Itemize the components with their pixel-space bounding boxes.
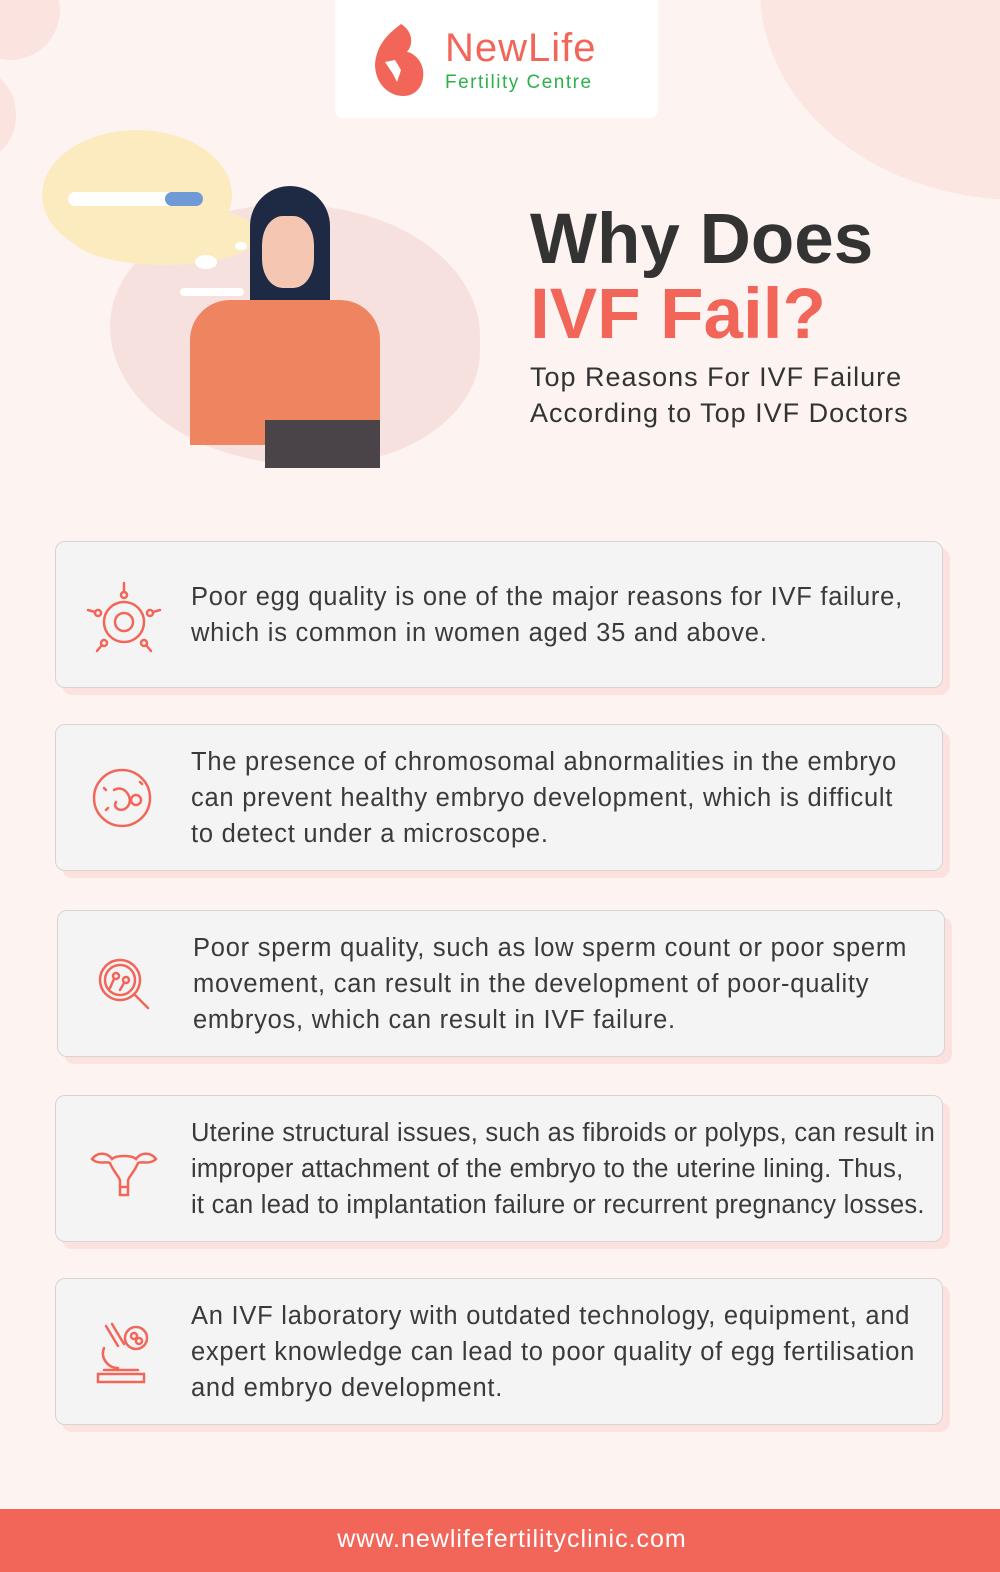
subtitle	[530, 362, 909, 428]
card 3: sperm quality: Poor sperm quality, such as low sperm count or poor sperm	[193, 934, 907, 962]
decorative background circles	[0, 0, 60, 60]
card 2: chromosomal: to detect under a microscope.	[191, 820, 549, 848]
card 2: chromosomal: can prevent healthy embryo development, which is difficult	[191, 784, 893, 812]
icon: uterus	[90, 1152, 158, 1196]
icon: egg with sperm	[86, 582, 162, 652]
logo box: Fertility Centre	[445, 72, 593, 93]
card 1: egg quality: Poor egg quality is one of the major reasons for IVF failure,	[191, 582, 903, 610]
card 5: lab	[55, 1278, 943, 1425]
card 4: uterine: improper attachment of the embryo to the uterine lining. Thus,	[191, 1154, 903, 1182]
title	[530, 200, 873, 354]
logo box	[335, 0, 658, 118]
icon: embryo	[92, 768, 152, 828]
title: Why Does	[530, 200, 873, 279]
card 4: uterine: it can lead to implantation failure or recurrent pregnancy losses.	[191, 1190, 925, 1218]
thought cloud	[42, 130, 232, 260]
subtitle: According to Top IVF Doctors	[530, 398, 909, 428]
footer: www.newlifefertilityclinic.com	[337, 1525, 687, 1553]
card 3: sperm quality: embryos, which can result in IVF failure.	[193, 1006, 676, 1034]
card 1: egg quality	[55, 541, 943, 688]
card 1: egg quality: which is common in women aged 35 and above.	[191, 618, 768, 646]
card 4: uterine: Uterine structural issues, such as fibroids or polyps, can result in	[191, 1118, 935, 1146]
woman	[250, 186, 330, 396]
icon: microscope	[96, 1322, 148, 1384]
illustration	[42, 130, 480, 468]
card 5: lab: and embryo development.	[191, 1374, 503, 1402]
card 3: sperm quality: movement, can result in the development of poor-quality	[193, 970, 869, 998]
logo icon	[375, 24, 424, 96]
title: IVF Fail?	[530, 275, 826, 354]
card 2: chromosomal	[55, 724, 943, 871]
card 5: lab: expert knowledge can lead to poor quality of egg fertilisation	[191, 1338, 915, 1366]
card 3: sperm quality	[57, 910, 945, 1057]
blob background	[110, 205, 480, 465]
logo text: NewLife	[445, 26, 597, 70]
subtitle: Top Reasons For IVF Failure	[530, 362, 902, 392]
card 5: lab: An IVF laboratory with outdated technology, equipment, and	[191, 1302, 910, 1330]
card 4: uterine	[55, 1095, 943, 1242]
icon: magnifier with sperm	[98, 958, 150, 1010]
card 2: chromosomal: The presence of chromosomal abnormalities in the embryo	[191, 748, 897, 776]
footer	[0, 1509, 1000, 1572]
